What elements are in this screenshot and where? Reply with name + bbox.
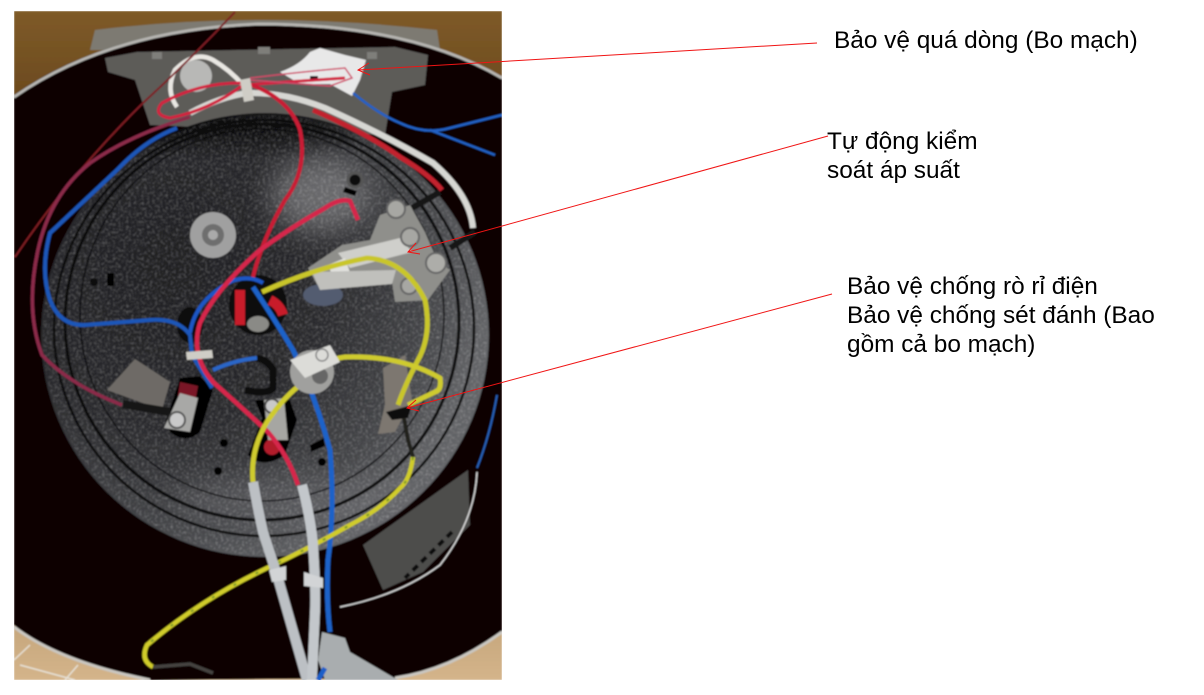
grey lid edge bbox=[90, 20, 440, 50]
main red wires bbox=[252, 85, 302, 277]
terminal hole top bbox=[229, 275, 287, 335]
black heat-shrink ends bbox=[412, 192, 475, 248]
silver screw washer bbox=[190, 212, 236, 258]
maroon wire bbox=[32, 117, 190, 405]
label: leakage and lightning protection: Bảo vệ chống sét đánh (Bao bbox=[847, 302, 1155, 329]
terminal hole black square bbox=[310, 76, 318, 80]
dark wire from top bbox=[15, 12, 235, 257]
right blue wires bbox=[353, 93, 502, 155]
left blue wire bbox=[45, 128, 212, 388]
label: automatic pressure control: soát áp suất bbox=[827, 157, 960, 184]
steel terminal post bbox=[247, 316, 269, 332]
bottom grey connector bbox=[318, 632, 398, 680]
silver cable bundle at top bbox=[280, 48, 366, 96]
white round fitting bbox=[180, 60, 212, 92]
central terminal block bbox=[248, 398, 297, 462]
yellow wire green flecks bbox=[147, 457, 413, 645]
thin pink wires bbox=[250, 68, 352, 86]
lower shaded chamber bbox=[363, 470, 470, 590]
disk highlights bbox=[102, 111, 410, 522]
blue loop around terminal bbox=[190, 278, 263, 333]
label: automatic pressure control: Tự động kiểm bbox=[827, 128, 978, 155]
leakage terminal bbox=[386, 405, 412, 420]
red wire along white wire bbox=[313, 110, 442, 190]
thermostat bracket bbox=[303, 200, 450, 306]
disk speckle texture bbox=[43, 115, 487, 555]
plate clips bbox=[152, 47, 377, 59]
neutral label clip bbox=[290, 345, 340, 394]
arrow: to leakage protection bbox=[407, 294, 832, 411]
blue jumper bbox=[213, 358, 257, 370]
leakage terminal plate bbox=[378, 355, 412, 434]
side terminal hole bbox=[177, 307, 203, 343]
label: overcurrent protection: Bảo vệ quá dòng (Bo mạch) bbox=[834, 27, 1138, 54]
thin white wire along chamber bbox=[340, 472, 477, 607]
silver top rim bbox=[14, 24, 502, 97]
white wire bbox=[190, 93, 473, 228]
black cooker interior bbox=[14, 24, 502, 680]
yellow wire middle bbox=[253, 357, 440, 482]
left grey sleeve bbox=[253, 482, 307, 680]
leakage lead to lower yellow wire bbox=[404, 418, 413, 457]
arrow: to pressure control bbox=[408, 136, 828, 254]
left terminal block bbox=[107, 359, 213, 438]
label: leakage and lightning protection: Bảo vệ chống rò rỉ điện bbox=[847, 273, 1098, 300]
small holes bbox=[107, 187, 357, 286]
black wire to centre terminal bbox=[245, 358, 273, 392]
white wire loop bbox=[170, 57, 243, 107]
red terminal sleeve bbox=[240, 290, 283, 325]
red wire loop bbox=[158, 78, 345, 118]
silver lower rim bbox=[14, 627, 502, 680]
label: automatic pressure control bbox=[827, 128, 978, 184]
lower-left cage lines bbox=[14, 645, 78, 680]
label: leakage and lightning protection bbox=[847, 273, 1155, 358]
disk ridges bbox=[54, 120, 474, 536]
bottom blue end bbox=[318, 668, 325, 680]
photo: inside of pressure cooker with wiring bbox=[14, 11, 502, 680]
main blue wire bbox=[253, 287, 332, 632]
yellow wire upper bbox=[262, 258, 427, 405]
dark lead at bottom bbox=[153, 664, 213, 673]
white cable ties bbox=[186, 78, 254, 360]
sleeve ties bbox=[269, 566, 323, 588]
hooked red wire bbox=[197, 200, 358, 485]
perforated dark slots bbox=[405, 532, 452, 578]
label: leakage and lightning protection: gồm cả bo mạch) bbox=[847, 331, 1035, 358]
arrow: to overcurrent board bbox=[358, 43, 817, 75]
grey mounting plate bbox=[105, 47, 428, 135]
yellow wire lower bbox=[145, 457, 413, 667]
heater disk bbox=[41, 113, 489, 557]
right thin blue wire bbox=[477, 395, 497, 468]
background: cardboard surface bbox=[14, 11, 502, 680]
right grey sleeve bbox=[302, 485, 315, 680]
